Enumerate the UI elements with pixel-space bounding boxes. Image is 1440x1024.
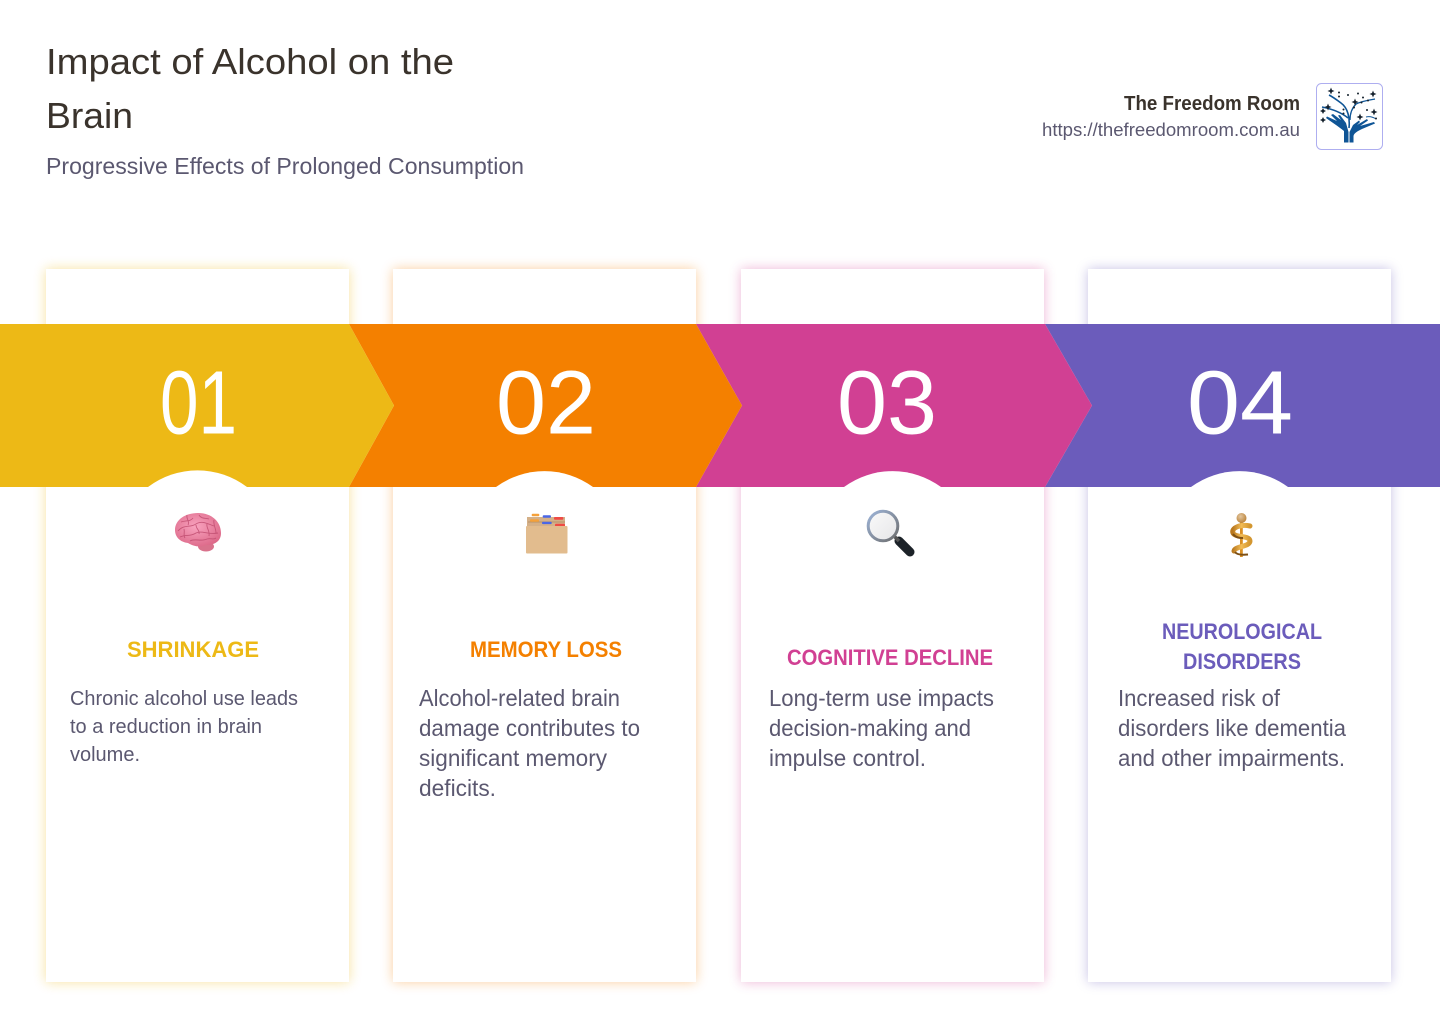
subtitle: Progressive Effects of Prolonged Consumption — [46, 153, 524, 179]
arrow band 02 — [349, 324, 742, 487]
body text: and other impairments. — [1118, 745, 1345, 771]
body text: Alcohol-related brain — [419, 685, 620, 711]
body text: impulse control. — [769, 745, 926, 771]
body text — [419, 685, 640, 801]
heading: NEUROLOGICAL — [1162, 619, 1322, 644]
icon tab — [148, 470, 247, 487]
body text — [70, 688, 298, 766]
body text: Long-term use impacts — [769, 685, 994, 711]
icon: tree logo — [1316, 84, 1382, 150]
icon: card file box — [526, 514, 568, 554]
title block — [46, 41, 524, 179]
body text: Increased risk of — [1118, 685, 1281, 711]
body text: deficits. — [419, 775, 496, 801]
body text — [769, 685, 994, 771]
icon tab — [496, 471, 593, 487]
body text: damage contributes to — [419, 715, 640, 741]
body text: decision-making and — [769, 715, 971, 741]
heading: COGNITIVE DECLINE — [787, 645, 993, 670]
number 02: 02 — [496, 354, 596, 454]
heading — [1162, 619, 1322, 674]
title: Brain — [46, 95, 133, 136]
heading: MEMORY LOSS — [470, 637, 622, 662]
heading: DISORDERS — [1183, 649, 1301, 674]
body text: Chronic alcohol use leads — [70, 688, 298, 710]
arrow band 01 — [0, 324, 394, 487]
icon tab — [844, 471, 941, 487]
icon: magnifying glass — [868, 511, 910, 552]
icon tab — [1191, 471, 1288, 487]
panel: 01 shrinkage — [0, 269, 394, 982]
title: Impact of Alcohol on the — [46, 41, 454, 82]
panel: 04 neurological disorders — [1045, 269, 1440, 982]
brand block — [1042, 84, 1382, 150]
panel: 03 cognitive decline — [696, 269, 1092, 982]
number 03: 03 — [837, 354, 937, 454]
arrow band 04 — [1045, 324, 1440, 487]
body text: significant memory — [419, 745, 607, 771]
title — [46, 41, 454, 136]
body text: to a reduction in brain — [70, 716, 262, 738]
brand name: The Freedom Room — [1124, 93, 1300, 115]
body text: disorders like dementia — [1118, 715, 1346, 741]
arrow band 03 — [696, 324, 1092, 487]
brand url: https://thefreedomroom.com.au — [1042, 120, 1300, 140]
number 04: 04 — [1187, 354, 1293, 454]
icon: rod of asclepius — [1233, 513, 1250, 557]
heading: SHRINKAGE — [127, 637, 259, 662]
number 01: 01 — [160, 354, 237, 454]
icon: brain — [175, 513, 221, 552]
body text — [1118, 685, 1346, 771]
panel: 02 memory loss — [349, 269, 742, 982]
body text: volume. — [70, 744, 140, 766]
